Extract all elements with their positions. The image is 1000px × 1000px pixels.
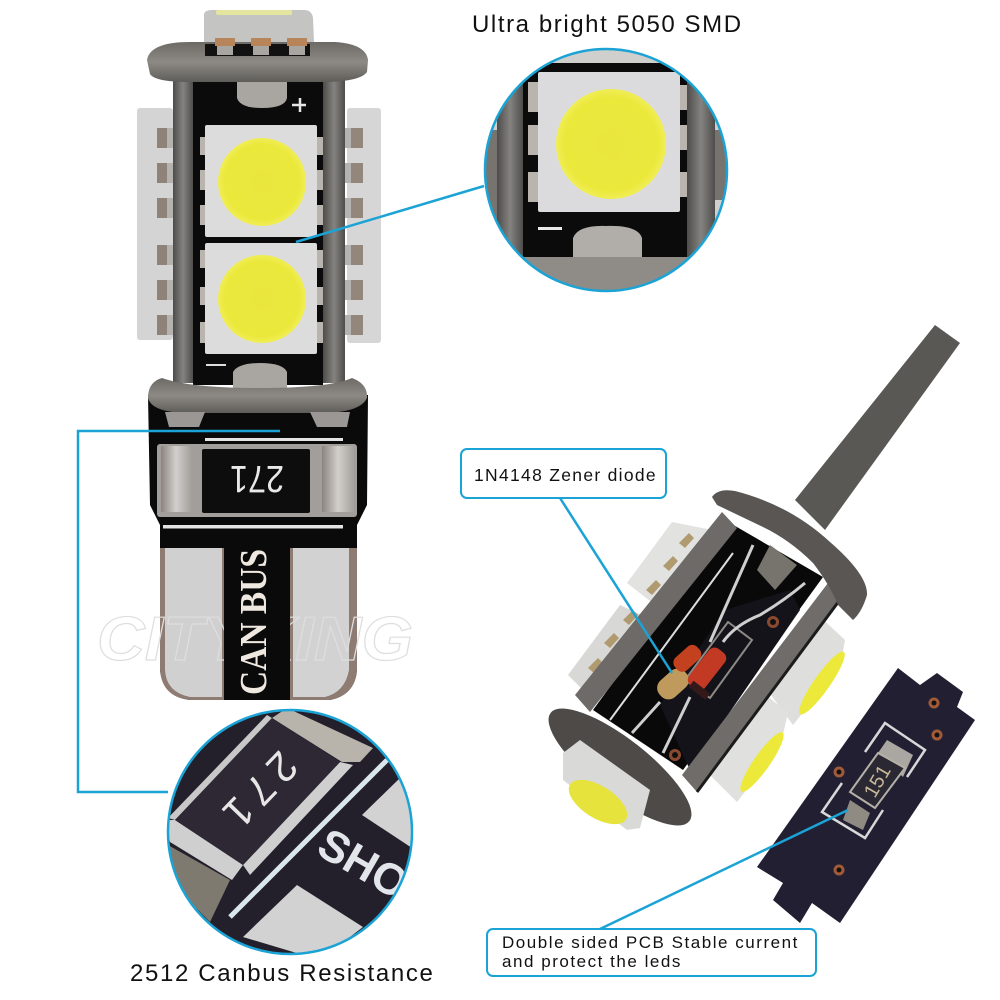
callout: 1N4148 Zener diode xyxy=(461,449,666,498)
271 resistor xyxy=(157,444,357,517)
arrow: leader to zener diode xyxy=(560,498,672,673)
icon: zoom circle on canbus resistor xyxy=(165,708,417,960)
metal pin xyxy=(795,325,960,530)
resistor body: 271 xyxy=(208,742,307,843)
top disc xyxy=(147,42,368,82)
icon: opened LED bulb xyxy=(533,325,960,843)
bottom disc xyxy=(148,378,367,427)
resistor body xyxy=(165,708,373,922)
watermark: CITYKING xyxy=(97,605,413,674)
icon: zoom circle on 5050 SMD xyxy=(485,49,727,293)
back LEDs on left xyxy=(568,522,712,697)
front LED 2 xyxy=(200,243,323,354)
callout: double sided PCB xyxy=(487,929,816,976)
icon: double sided PCB: 151 xyxy=(860,762,896,801)
callout: double sided PCB: and protect the leds xyxy=(502,952,682,971)
heading: 2512 Canbus Resistance: 2512 Canbus Resistance xyxy=(130,960,434,987)
bottom disc with LED xyxy=(533,691,707,843)
callout: 1N4148 Zener diode: 1N4148 Zener diode xyxy=(474,465,657,485)
front LED 1 xyxy=(200,125,323,237)
arrow: leader to canbus resistance circle xyxy=(78,431,280,792)
zener diode and resistor components xyxy=(653,642,729,704)
pads and trace: SHO xyxy=(310,819,417,909)
LED board between struts xyxy=(173,80,345,390)
struts xyxy=(575,512,842,792)
side LEDs with pads xyxy=(137,108,381,343)
callout: double sided PCB: Double sided PCB Stable current xyxy=(502,933,799,952)
inner board xyxy=(593,523,823,770)
icon: T10 LED bulb xyxy=(137,10,381,700)
271 resistor: 271 xyxy=(230,457,284,499)
arrow: leader to PCB resistor xyxy=(600,810,848,929)
pads and trace xyxy=(230,760,417,960)
top LED chip xyxy=(204,10,314,55)
top disc xyxy=(712,490,867,620)
CAN BUS label: CAN BUS xyxy=(233,549,275,695)
icon: double sided PCB xyxy=(757,668,975,923)
wedge base PCB xyxy=(148,395,368,700)
heading: Ultra bright 5050 SMD: Ultra bright 5050 SMD xyxy=(472,11,743,38)
right LEDs xyxy=(700,612,850,802)
arrow: leader to 5050 SMD circle xyxy=(296,186,484,242)
